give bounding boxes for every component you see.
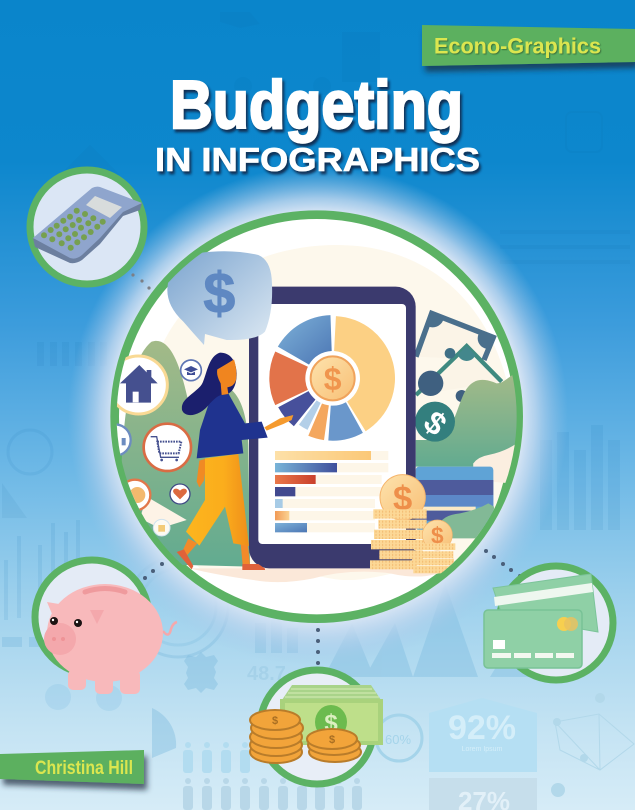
author tag: Christina Hill: Christina Hill [35, 757, 133, 779]
icon: coin stacks [250, 710, 361, 763]
donut chart: $ [324, 361, 342, 397]
faint background infographic elements: 92% [448, 709, 516, 747]
series tag: Econo-Graphics: Econo-Graphics [434, 34, 601, 58]
banknotes [416, 305, 502, 402]
calculator circle [30, 170, 144, 284]
cash and coins circle [250, 670, 383, 784]
credit card [416, 467, 494, 538]
icon: coin stacks: $ [272, 715, 278, 727]
title [155, 67, 480, 179]
icon: orange ring [127, 478, 152, 511]
faint background infographic elements: 48.7 [247, 663, 286, 685]
credit cards circle [484, 566, 613, 680]
icon: credit cards [484, 574, 598, 668]
icon: coin stacks: $ [329, 734, 335, 746]
right green hill [416, 373, 523, 467]
main circle panel [99, 215, 523, 619]
icon: piggy bank [44, 584, 177, 694]
speech bubble with dollar [167, 251, 272, 345]
faint background infographic elements: Lorem Ipsum [462, 746, 503, 753]
speech bubble with dollar: $ [203, 262, 235, 326]
icon: gift [153, 519, 170, 536]
faint background infographic elements: 60% [385, 732, 411, 747]
coin stacks [370, 475, 455, 573]
scene backdrop [147, 245, 513, 580]
icon: cash stack: $ [324, 710, 338, 737]
coin stacks: $ [431, 522, 444, 548]
presenter figure [177, 353, 293, 570]
glow behind main circle [68, 166, 568, 666]
tablet [249, 287, 416, 568]
icon: house [109, 356, 167, 414]
donut chart [269, 315, 395, 441]
title: Budgeting [170, 67, 463, 143]
title: IN INFOGRAPHICS [155, 142, 480, 179]
icon: heart [170, 484, 190, 504]
coin stacks: $ [393, 480, 412, 518]
icon: partial blue ring [116, 423, 132, 456]
series tag: Econo-Graphics [422, 25, 635, 66]
connector dots [131, 273, 522, 665]
icon: graduation cap [181, 360, 201, 381]
piggy bank circle [35, 560, 177, 694]
bar chart [275, 451, 388, 532]
icon: shopping cart [144, 424, 191, 471]
left green hill [120, 341, 250, 567]
author tag: Christina Hill [0, 750, 144, 784]
dollar coin: $ [417, 404, 454, 443]
icon: calculator [33, 187, 142, 263]
